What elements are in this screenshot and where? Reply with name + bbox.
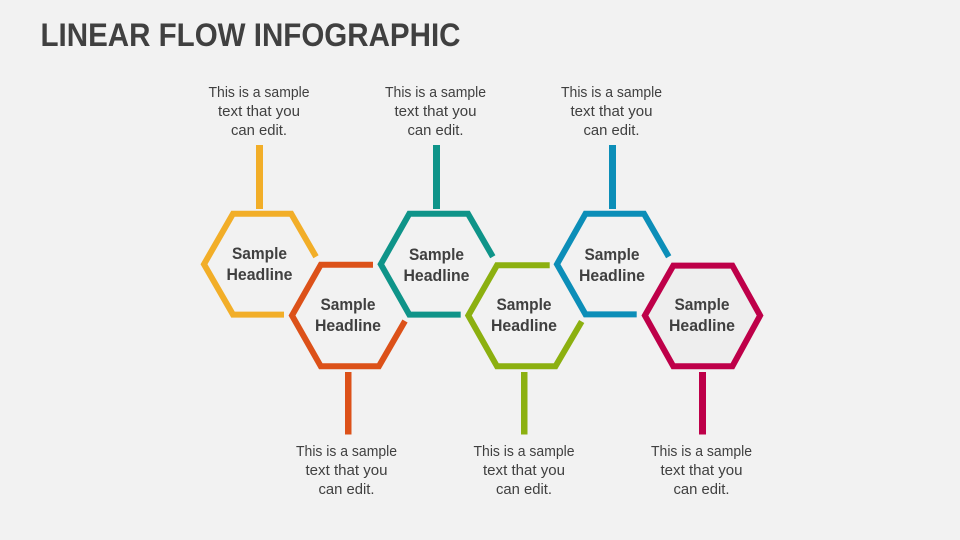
connector: crimson [699,372,706,434]
text block: teal description: text that you [394,104,476,120]
text block: orange description [296,444,397,498]
step 5: blue [557,85,669,314]
headline: green: Headline [491,317,557,335]
text block: blue description [561,85,662,139]
headline: crimson [669,296,735,335]
text block: blue description: text that you [570,104,652,120]
text block: orange description: text that you [306,463,388,479]
headline: green: Sample [496,296,552,314]
headline: teal [404,246,470,285]
text block: crimson description: This is a sample [651,444,752,460]
hexagon: green [468,265,582,366]
text block: blue description: can edit. [584,123,640,139]
step 1: yellow [204,85,316,315]
text block: teal description: This is a sample [385,85,486,101]
step 2: orange [292,265,405,498]
text block: green description: text that you [483,463,565,479]
headline: blue: Sample [584,246,640,264]
headline: teal: Headline [404,267,470,285]
headline: yellow: Headline [226,266,292,284]
headline: crimson: Sample [674,296,730,314]
connector: yellow [256,145,263,209]
hexagon: yellow [204,214,316,315]
text block: yellow description: text that you [218,104,300,120]
text block: teal description [385,85,486,139]
text block: yellow description: can edit. [231,123,287,139]
headline: crimson: Headline [669,317,735,335]
text block: crimson description: text that you [660,463,742,479]
headline: yellow [226,245,292,284]
text block: yellow description: This is a sample [208,85,310,101]
text block: yellow description [208,85,310,139]
text block: teal description: can edit. [408,123,464,139]
headline: teal: Sample [409,246,464,264]
connector: orange [345,372,352,434]
headline: orange [315,296,381,335]
headline: yellow: Sample [232,245,287,263]
hexagon: orange [292,265,405,366]
headline: orange: Headline [315,317,381,335]
step 6: crimson [645,266,760,498]
hexagon: teal [381,214,493,315]
text block: orange description: This is a sample [296,444,397,460]
text block: green description: can edit. [496,482,552,498]
step 4: green [468,265,582,498]
headline: green [491,296,557,335]
connector: teal [433,145,440,209]
hexagon: blue [557,214,669,314]
text block: crimson description [651,444,752,498]
text block: green description: This is a sample [474,444,574,460]
connector: green [521,372,528,434]
text block: orange description: can edit. [318,482,374,498]
connector: blue [609,145,616,209]
headline: blue: Headline [579,267,645,285]
text block: blue description: This is a sample [561,85,662,101]
headline: orange: Sample [320,296,376,314]
title: LINEAR FLOW INFOGRAPHIC [40,17,460,53]
text block: crimson description: can edit. [674,482,730,498]
step 3: teal [381,85,493,315]
text block: green description [474,444,574,498]
headline: blue [579,246,645,285]
hexagon: crimson [645,266,760,366]
